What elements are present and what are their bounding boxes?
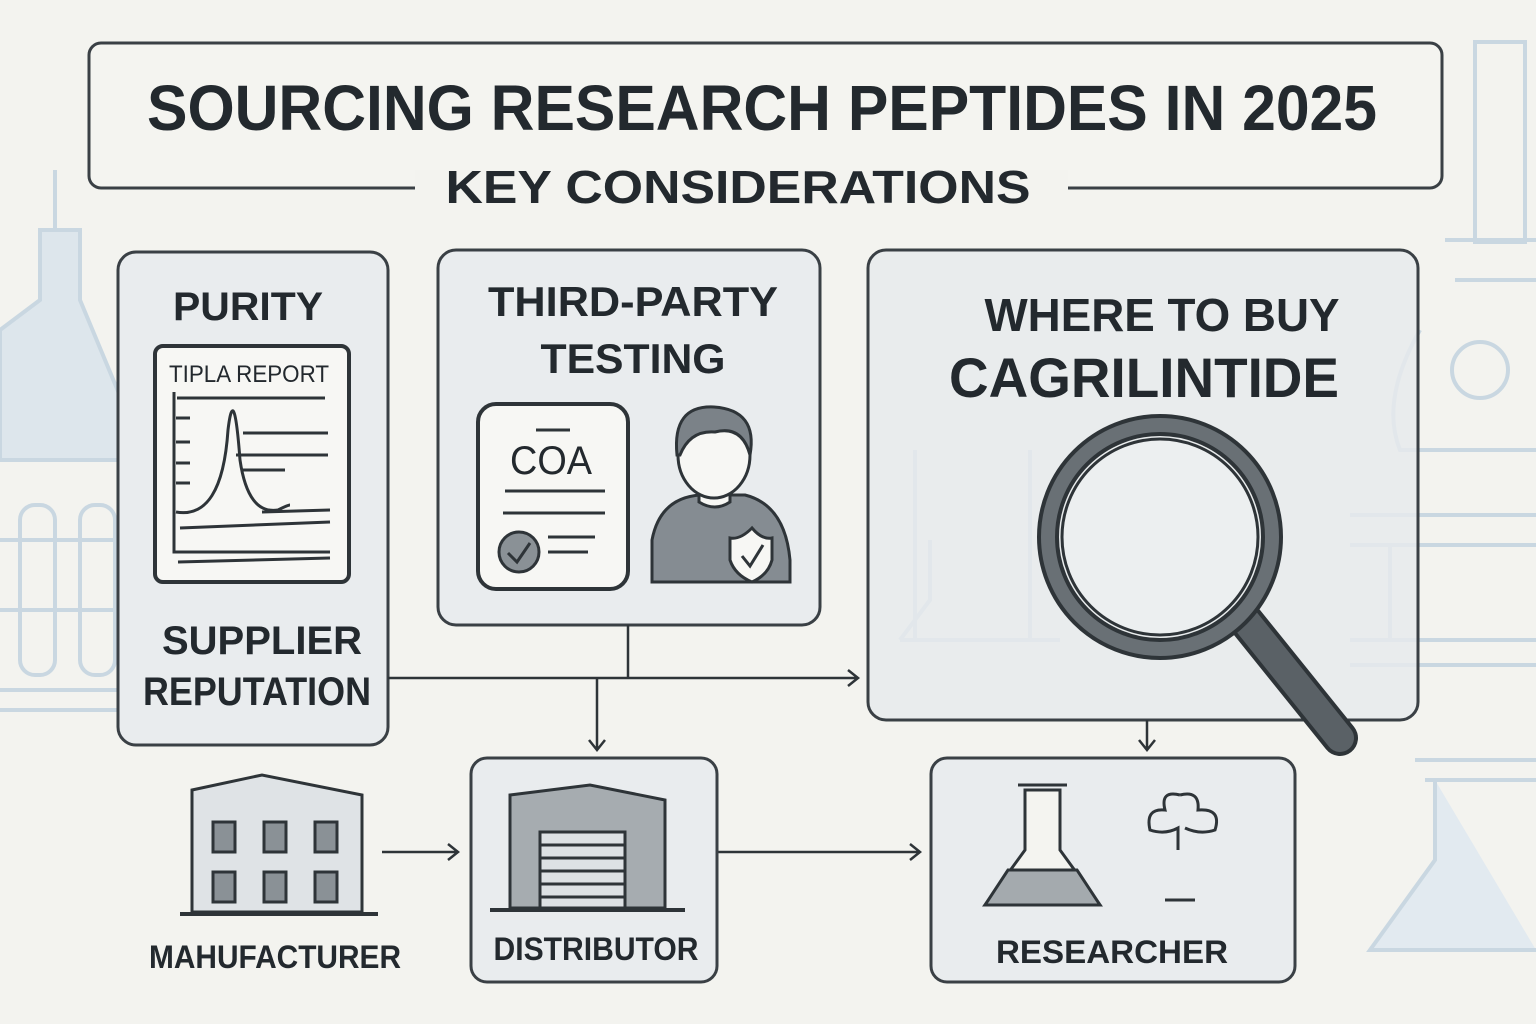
panel: where to buy cagrilintide: CAGRILINTIDE <box>949 346 1339 409</box>
arrows: connectors <box>382 625 1155 860</box>
panel: distributor <box>471 758 717 982</box>
panel: purity / supplier reputation: PURITY <box>173 285 323 329</box>
icon: COA document: COA <box>510 439 592 483</box>
panel: purity / supplier reputation: SUPPLIER <box>162 619 362 663</box>
panel: purity / supplier reputation <box>118 252 388 745</box>
icon: molecule leaf <box>1149 794 1217 900</box>
panel: purity / supplier reputation: REPUTATION <box>143 670 371 714</box>
panel: distributor: DISTRIBUTOR <box>494 931 698 967</box>
panel: third-party testing: TESTING <box>540 335 726 382</box>
icon: warehouse <box>490 785 685 910</box>
icon: HPLC report <box>155 346 349 582</box>
icon: magnifying glass <box>1048 425 1340 738</box>
icon: manufacturer building <box>180 775 378 914</box>
icon: person with check <box>652 407 790 582</box>
icon: COA document <box>478 404 628 589</box>
panel: researcher: RESEARCHER <box>996 934 1228 970</box>
label: manufacturer: MAHUFACTURER <box>149 939 401 975</box>
panel: third-party testing: THIRD-PARTY <box>488 278 778 325</box>
panel: where to buy cagrilintide <box>868 250 1418 738</box>
panel: third-party testing <box>438 250 820 625</box>
panel: where to buy cagrilintide: WHERE TO BUY <box>984 289 1340 341</box>
icon: flask <box>985 785 1100 905</box>
subtitle: KEY CONSIDERATIONS <box>446 161 1030 213</box>
title: SOURCING RESEARCH PEPTIDES IN 2025 <box>147 72 1377 144</box>
panel: researcher <box>931 758 1295 982</box>
title box <box>89 43 1442 213</box>
icon: HPLC report: TIPLA REPORT <box>169 361 329 388</box>
